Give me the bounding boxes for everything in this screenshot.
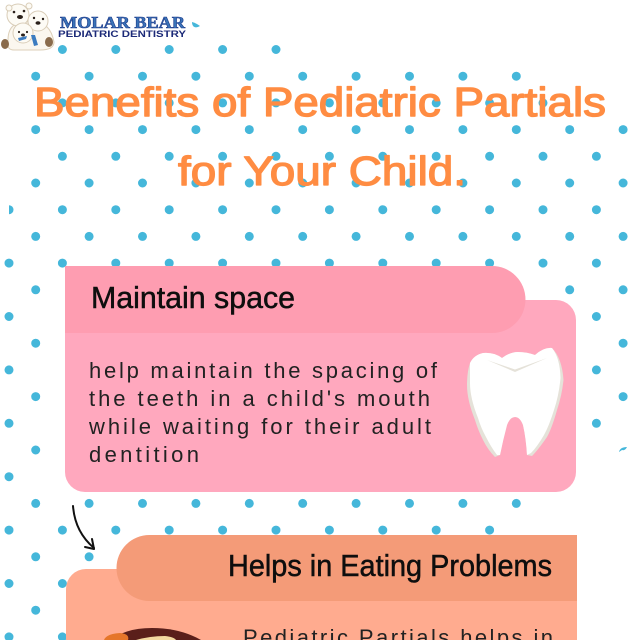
text block: while waiting for their adult xyxy=(88,414,431,439)
heading: maintain space: Maintain space xyxy=(91,280,295,315)
panel body xyxy=(66,569,577,640)
title xyxy=(34,79,606,194)
icon: tooth xyxy=(467,348,564,457)
panel header xyxy=(65,266,525,333)
logo: Molar Bear Pediatric Dentistry xyxy=(1,3,187,50)
panel body xyxy=(65,300,576,492)
text block: the teeth in a child's mouth xyxy=(89,386,430,411)
title: Benefits of Pediatric Partials xyxy=(34,79,606,125)
heading: helps in eating problems: Helps in Eating Problems xyxy=(228,548,552,583)
logo wordmark: MOLAR BEAR xyxy=(60,13,186,32)
logo tagline: PEDIATRIC DENTISTRY xyxy=(58,29,187,40)
text block xyxy=(88,358,438,467)
text block: dentition xyxy=(89,442,199,467)
text block: help maintain the spacing of xyxy=(89,358,438,383)
icon: polar bear family xyxy=(1,3,54,50)
panel header xyxy=(116,535,577,601)
icon: food bowl xyxy=(104,628,201,640)
panel: maintain space xyxy=(65,266,576,492)
panel: helps in eating problems xyxy=(66,535,577,640)
arrow xyxy=(73,506,94,549)
title: for Your Child. xyxy=(178,148,466,194)
